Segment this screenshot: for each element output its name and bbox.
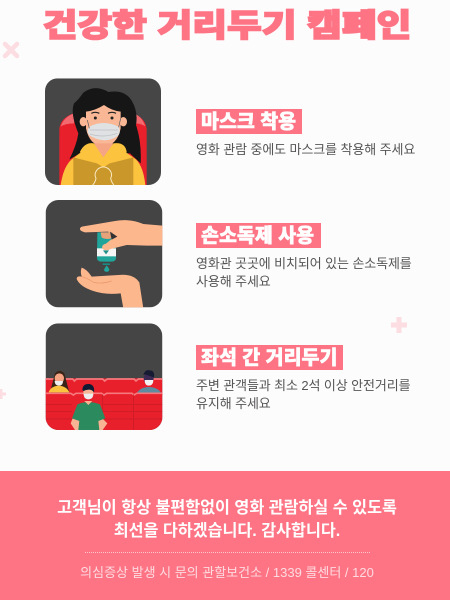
heading: use sanitizer: 손소독제 사용 (201, 225, 314, 247)
text: sanitizer description: 영화관 곳곳에 비치되어 있는 손소독제를 (196, 256, 412, 271)
text: sanitizer description: 사용해 주세요 (196, 274, 271, 289)
title: 건강한 거리두기 캠페인 (43, 7, 411, 43)
footer message: 최선을 다하겠습니다. 감사합니다. (114, 522, 340, 540)
footer message (57, 498, 397, 540)
footer message: 고객님이 항상 불편함없이 영화 관람하실 수 있도록 (57, 499, 397, 517)
section 3: distancing (196, 345, 410, 411)
illustration: woman wearing mask (45, 78, 161, 185)
text: distancing description: 유지해 주세요 (196, 396, 271, 411)
text: distancing description (196, 378, 410, 411)
footer contact line: 의심증상 발생 시 문의 관할보건소 / 1339 콜센터 / 120 (80, 565, 374, 580)
heading: wear mask: 마스크 착용 (201, 111, 296, 133)
decoration: plus (391, 317, 407, 333)
illustration: hand sanitizer (46, 200, 162, 308)
illustration: theater seats with distancing (46, 323, 162, 430)
text: mask description: 영화 관람 중에도 마스크를 착용해 주세요 (196, 142, 415, 157)
heading: seat distancing: 좌석 간 거리두기 (201, 347, 337, 369)
footer panel (0, 471, 450, 600)
section 2: sanitizer (196, 223, 412, 289)
text: sanitizer description (196, 256, 412, 289)
section 1: mask (196, 109, 415, 157)
decoration: x mark (2, 42, 20, 58)
text: distancing description: 주변 관객들과 최소 2석 이상 안전거리를 (196, 378, 410, 393)
decoration: small plus (0, 389, 6, 399)
